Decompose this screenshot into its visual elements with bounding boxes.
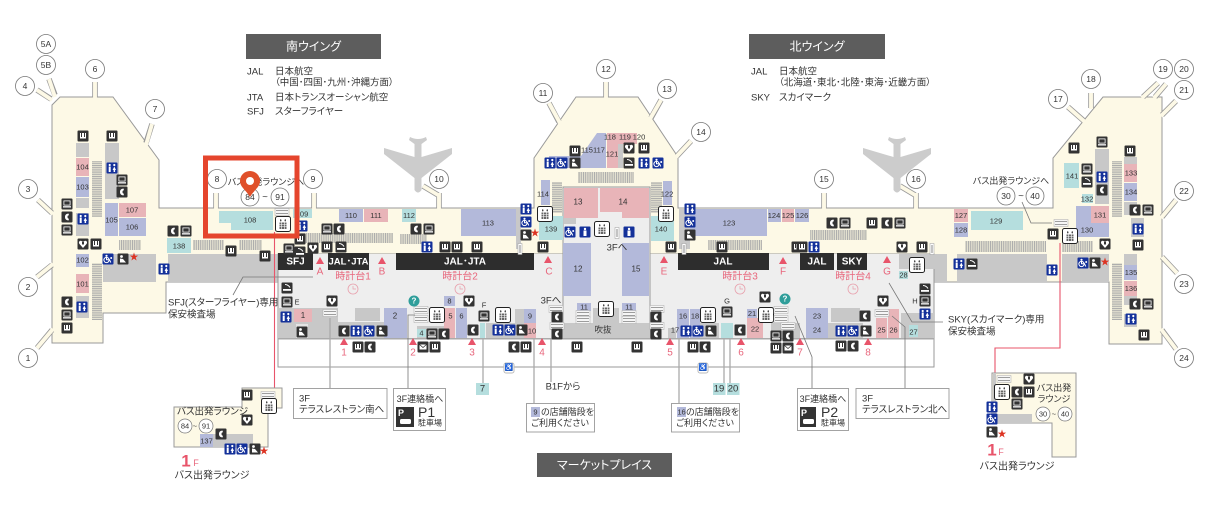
- callout: SKY security: [948, 314, 1044, 338]
- shops: south wing: 112: [403, 211, 415, 220]
- shops: lower hall: 6: [459, 312, 464, 320]
- entrance markers A-G and 1-8: B: [379, 266, 386, 278]
- shops: lower hall: 24: [813, 326, 821, 334]
- panel: 1F bus lounge south: ★: [259, 446, 269, 456]
- shops: lower hall: 28: [899, 270, 908, 280]
- shops: lower hall: 4: [419, 328, 424, 338]
- callout: SFJ security: [168, 296, 278, 320]
- callout: terrace restaurant north: テラスレストラン北へ: [862, 404, 948, 416]
- panel: 1F bus lounge north: 1: [987, 440, 997, 460]
- shops: north wing: 134: [1125, 188, 1137, 196]
- shops: south wing: [76, 143, 521, 318]
- legend: south wing airlines: スターフライヤー: [275, 106, 343, 118]
- panel: 1F bus lounge north: 40: [1061, 410, 1069, 418]
- callout: P1 parking: 3F連絡橋へ: [397, 393, 443, 404]
- legend: north wing airlines: スカイマーク: [779, 92, 831, 104]
- panel: 1F bus lounge south: F: [193, 458, 199, 468]
- panel: 1F bus lounge north: 30: [1039, 410, 1047, 418]
- entrance markers A-G and 1-8: C: [545, 266, 553, 278]
- bus lounge note south: バス出発ラウンジへ: [228, 176, 304, 187]
- location pin: [240, 171, 260, 197]
- panel: 1F bus lounge south: バス出発ラウンジ: [174, 468, 250, 482]
- callout: P2 parking: [798, 388, 848, 430]
- red connection lines to 1F bus lounges: [274, 232, 1060, 390]
- shops: lower hall: 9: [528, 312, 532, 320]
- clock towers: [335, 270, 871, 294]
- facility icons: north pier: ★: [1100, 257, 1110, 267]
- shops: lower hall: 5: [448, 312, 453, 320]
- facility icons: hall: [280, 282, 930, 373]
- shops: lower hall: 8: [447, 296, 452, 306]
- callout: terrace restaurant south: テラスレストラン南へ: [299, 404, 385, 416]
- panel: 1F bus lounge south: 137: [200, 436, 213, 446]
- heading: south wing: [246, 34, 381, 59]
- gate numbers: 7: [153, 104, 158, 114]
- bus lounge note north: ~: [1018, 190, 1024, 202]
- airline counters: JAL･JTA: [329, 256, 369, 268]
- shops: center pier: 114: [537, 190, 549, 198]
- panel: 1F bus lounge north: ラウンジ: [1038, 394, 1071, 404]
- callout: P2 parking: 3F連絡橋へ: [800, 393, 846, 404]
- legend: south wing airlines: SFJ: [247, 106, 264, 118]
- shops: lower hall: 吹抜: [594, 324, 612, 334]
- gate numbers: 4: [23, 81, 28, 91]
- facility icons: center: 3Fへ: [607, 242, 628, 254]
- callout: SFJ security: 保安検査場: [168, 308, 216, 320]
- facility icons: hall: ♿: [505, 362, 514, 372]
- legend: south wing airlines: [247, 66, 394, 118]
- panel: 1F bus lounge south: 1: [181, 452, 191, 470]
- panel: 1F bus lounge south: ~: [193, 422, 198, 430]
- callout: P2 parking: P: [801, 408, 807, 418]
- shops: center pier: 121: [606, 150, 618, 158]
- shops: south wing: 106: [126, 222, 138, 232]
- callout: shop 16 stairs: ご利用ください: [676, 417, 734, 428]
- stairs hatch: [92, 161, 1122, 320]
- shops: center pier: 120: [633, 132, 645, 142]
- shops: lower hall: 27: [909, 328, 918, 336]
- shops: lower hall: 21: [748, 309, 756, 318]
- callout: shop 9 stairs: 9: [533, 408, 538, 416]
- gate numbers: 5B: [41, 60, 52, 70]
- bus lounge note south: ~: [262, 192, 268, 202]
- facility icons: center: [410, 142, 802, 254]
- entrance markers A-G and 1-8: [316, 256, 891, 358]
- shops: center pier: 14: [619, 198, 628, 206]
- shops: center pier: 119: [619, 132, 631, 142]
- facility icons: hall: ?: [783, 294, 788, 304]
- entrance markers A-G and 1-8: 6: [738, 348, 744, 358]
- shops: center pier: 140: [655, 224, 667, 234]
- clock towers: 時計台2: [442, 270, 478, 282]
- panel: 1F bus lounge north: バス出発: [1036, 382, 1071, 393]
- facility icons: hall: ♿: [699, 362, 708, 372]
- panel: 1F bus lounge north: ~: [1052, 410, 1057, 418]
- callout: SKY security: SKY(スカイマーク)専用: [948, 314, 1044, 326]
- facility icons: north pier: [796, 136, 1154, 340]
- gate numbers: 20: [1179, 64, 1189, 74]
- airline counters: SFJ: [286, 256, 305, 268]
- shops: north wing: 131: [1094, 210, 1106, 220]
- shops: north wing: 123: [723, 218, 735, 228]
- shops: lower hall: 16: [679, 312, 687, 320]
- shops: south wing: 113: [482, 218, 494, 228]
- gate numbers: 11: [539, 88, 548, 98]
- shops: lower hall: 22: [751, 324, 759, 334]
- shops: lower hall: 10: [528, 326, 536, 336]
- panel: 1F bus lounge north: F: [998, 447, 1004, 457]
- gate numbers: 24: [1179, 353, 1189, 363]
- entrance markers A-G and 1-8: 3: [469, 348, 475, 358]
- entrance markers A-G and 1-8: 7: [797, 348, 803, 358]
- facility icons: south pier: ★: [129, 252, 139, 262]
- legend: north wing airlines: [751, 66, 931, 104]
- shops: center pier: 139: [545, 224, 557, 234]
- callout: terrace restaurant south: 3F: [299, 394, 310, 404]
- facility icons: hall: ?: [412, 296, 417, 306]
- legend: north wing airlines: SKY: [751, 92, 771, 104]
- shops: south wing: 110: [345, 211, 357, 220]
- entrance markers A-G and 1-8: F: [780, 266, 786, 278]
- panel: 1F bus lounge south: [174, 388, 282, 482]
- shops: south wing: 102: [76, 256, 89, 264]
- shops: lower hall: 17: [671, 326, 679, 334]
- gate numbers: [16, 34, 1194, 368]
- facility icons: south pier: [62, 130, 346, 334]
- shops: lower hall: 2: [393, 312, 398, 320]
- shops: lower hall: 1: [301, 311, 306, 320]
- facility icons: hall: E: [294, 298, 300, 306]
- panel: 1F bus lounge north: ★: [997, 429, 1007, 439]
- shops: north wing: [679, 149, 1144, 327]
- shops: center pier: 15: [632, 264, 641, 274]
- heading: market place: マーケットプレイス: [557, 458, 652, 472]
- legend: south wing airlines: JAL: [247, 66, 263, 78]
- entrance markers A-G and 1-8: 8: [865, 348, 871, 358]
- shops: center pier: 13: [574, 198, 583, 206]
- gate numbers: 16: [911, 174, 921, 184]
- gate numbers: 1: [26, 353, 31, 363]
- callout: P2 parking: P2: [821, 404, 838, 420]
- shops: center pier: 118: [604, 132, 616, 142]
- shops: north wing: 130: [1081, 226, 1093, 234]
- shops: lower hall: 11: [580, 302, 588, 312]
- heading: north wing: [749, 34, 885, 59]
- entrance markers A-G and 1-8: E: [661, 266, 668, 278]
- shops: north wing: 128: [955, 226, 967, 234]
- legend: north wing airlines: （北海道･東北･北陸･東海･近畿方面）: [779, 76, 931, 88]
- airline counters: JAL: [808, 256, 826, 268]
- facility icons: hall: F: [482, 300, 487, 310]
- shops: north wing: 141: [1066, 172, 1078, 180]
- gate numbers: 5A: [41, 39, 52, 49]
- shops: south wing: 104: [76, 162, 89, 172]
- shops: center pier: 115: [581, 146, 593, 154]
- entrance markers A-G and 1-8: G: [883, 266, 891, 278]
- panel: 1F bus lounge south: 91: [202, 422, 210, 430]
- shops: lower hall: 18: [691, 312, 699, 320]
- bus lounge note north: [973, 175, 1049, 205]
- legend: south wing airlines: 日本航空: [275, 66, 313, 78]
- shops: south wing: 107: [126, 206, 138, 214]
- legend: south wing airlines: 日本トランスオーシャン航空: [275, 92, 388, 104]
- shops: south wing: 111: [370, 211, 382, 220]
- heading: south wing: 南ウイング: [286, 38, 342, 54]
- shops: south wing: 101: [76, 280, 89, 288]
- shops: north wing: 132: [1081, 194, 1093, 204]
- bus lounge note south: [228, 176, 304, 206]
- shops: north wing: 127: [955, 211, 967, 220]
- security gray bands: [103, 254, 1109, 282]
- gate numbers: 17: [1053, 94, 1063, 104]
- label: B1F: B1Fから: [546, 382, 580, 392]
- shops: lower hall: 11: [625, 302, 633, 312]
- shops: center pier: 12: [574, 264, 583, 274]
- callout: shop 9 stairs: の店舗階段を: [541, 406, 594, 417]
- entrance markers A-G and 1-8: 2: [410, 348, 416, 358]
- entrance markers A-G and 1-8: 5: [667, 348, 673, 358]
- gate numbers: 8: [215, 174, 220, 184]
- labels: 19 and 20 tags: 20: [728, 384, 738, 394]
- legend: north wing airlines: JAL: [751, 66, 767, 78]
- airline counters: JAL･JTA: [444, 256, 486, 268]
- callout: terrace restaurant south: [294, 388, 387, 418]
- facility icons: hall: H: [912, 296, 918, 306]
- shops: south wing: 109: [296, 210, 308, 218]
- gate numbers: 21: [1179, 85, 1189, 95]
- airline counters: JAL: [714, 256, 732, 268]
- shops: north wing: 124: [768, 211, 780, 220]
- heading: north wing: 北ウイング: [790, 40, 845, 54]
- bus lounge note north: 30: [1001, 191, 1011, 201]
- gate numbers: 23: [1179, 279, 1189, 289]
- labels: 19 and 20 tags: 19: [714, 384, 724, 394]
- shops: south wing: 103: [76, 182, 89, 192]
- shops: center pier: [537, 132, 674, 296]
- airline counters: [278, 253, 867, 270]
- facility icons: hall: G: [724, 296, 730, 306]
- callout: SKY security: 保安検査場: [948, 326, 996, 338]
- panel: 1F bus lounge south: 84: [181, 422, 189, 430]
- entrance markers A-G and 1-8: 1: [341, 348, 347, 358]
- gate numbers: 6: [93, 64, 98, 74]
- legend: south wing airlines: JTA: [247, 92, 264, 104]
- callout: P1 parking: [394, 388, 446, 430]
- gate numbers: 15: [819, 174, 829, 184]
- shops: lower hall: 23: [813, 312, 821, 320]
- callout: terrace restaurant north: 3F: [862, 394, 873, 404]
- main hall: [278, 187, 934, 367]
- callout: P2 parking: 駐車場: [821, 418, 845, 428]
- shops: north wing: 125: [782, 211, 794, 220]
- gate numbers: 22: [1179, 186, 1189, 196]
- gate numbers: 3: [26, 184, 31, 194]
- bus lounge note north: 40: [1030, 191, 1040, 201]
- gate numbers: 9: [311, 174, 316, 184]
- clock towers: 時計台3: [722, 270, 758, 282]
- callout: SFJ security: SFJ(スターフライヤー)専用: [168, 296, 278, 308]
- callout: shop 16 stairs: [672, 404, 740, 432]
- gate numbers: 13: [662, 84, 672, 94]
- facility icons: center: ★: [530, 228, 540, 238]
- shops: south wing: 108: [244, 216, 256, 224]
- callout: shop 16 stairs: の店舗階段を: [686, 406, 739, 417]
- facility icons: hall: 3Fへ: [541, 296, 562, 306]
- callout: P1 parking: P: [398, 408, 404, 418]
- gate numbers: 10: [434, 174, 444, 184]
- shops: north wing: 126: [796, 211, 808, 220]
- gate numbers: 12: [601, 64, 611, 74]
- highlight frame: [206, 158, 297, 236]
- shops: south wing: 138: [173, 242, 185, 250]
- callout: terrace restaurant north: [856, 388, 949, 418]
- shops: lower hall: 26: [889, 326, 898, 334]
- airplane silhouette north: [863, 137, 931, 192]
- panel: 1F bus lounge north: [979, 373, 1076, 472]
- shops: north wing: 129: [990, 216, 1002, 226]
- shops: south wing: 105: [105, 216, 118, 224]
- label: gate 7 tag: [476, 383, 489, 395]
- gate numbers: 18: [1086, 74, 1096, 84]
- gate numbers: 19: [1158, 64, 1168, 74]
- callout: shop 16 stairs: 16: [677, 408, 686, 416]
- shops: north wing: 135: [1125, 268, 1137, 277]
- entrance markers A-G and 1-8: A: [317, 266, 324, 278]
- airline counters: SKY: [842, 256, 863, 268]
- gate numbers: 14: [696, 127, 706, 137]
- clock towers: 時計台4: [835, 270, 871, 282]
- callout: shop 9 stairs: ご利用ください: [531, 417, 589, 428]
- label: gate 7 tag: 7: [480, 384, 485, 394]
- bus lounge note north: バス出発ラウンジへ: [973, 175, 1049, 186]
- labels: 19 and 20 tags: [713, 383, 740, 395]
- gate numbers: 2: [26, 282, 31, 292]
- panel: 1F bus lounge north: バス出発ラウンジ: [979, 460, 1055, 472]
- shops: center pier: 122: [661, 190, 673, 198]
- heading: market place: [537, 453, 672, 477]
- bus lounge note south: 91: [275, 192, 285, 202]
- callout: P1 parking: P1: [418, 404, 435, 420]
- clock towers: 時計台1: [335, 270, 371, 282]
- shops: center pier: 117: [593, 146, 605, 154]
- jet bridges: [37, 79, 1177, 349]
- shops: north wing: 136: [1125, 284, 1137, 293]
- entrance markers A-G and 1-8: 4: [539, 348, 545, 358]
- callout: P1 parking: 駐車場: [418, 418, 442, 428]
- shops: north wing: 133: [1125, 168, 1137, 178]
- callout: shop 9 stairs: [526, 404, 594, 432]
- panel: 1F bus lounge south: バス出発ラウンジ: [177, 406, 248, 418]
- bus lounge note south: 84: [245, 192, 255, 202]
- terminal floor outline: [52, 97, 1162, 344]
- legend: south wing airlines: （中国･四国･九州･沖縄方面）: [275, 76, 394, 88]
- leader lines: [233, 202, 1052, 403]
- shops: lower hall: 25: [877, 326, 886, 334]
- airplane silhouette south: [384, 137, 452, 192]
- shops: lower hall: [278, 254, 947, 338]
- legend: north wing airlines: 日本航空: [779, 66, 817, 78]
